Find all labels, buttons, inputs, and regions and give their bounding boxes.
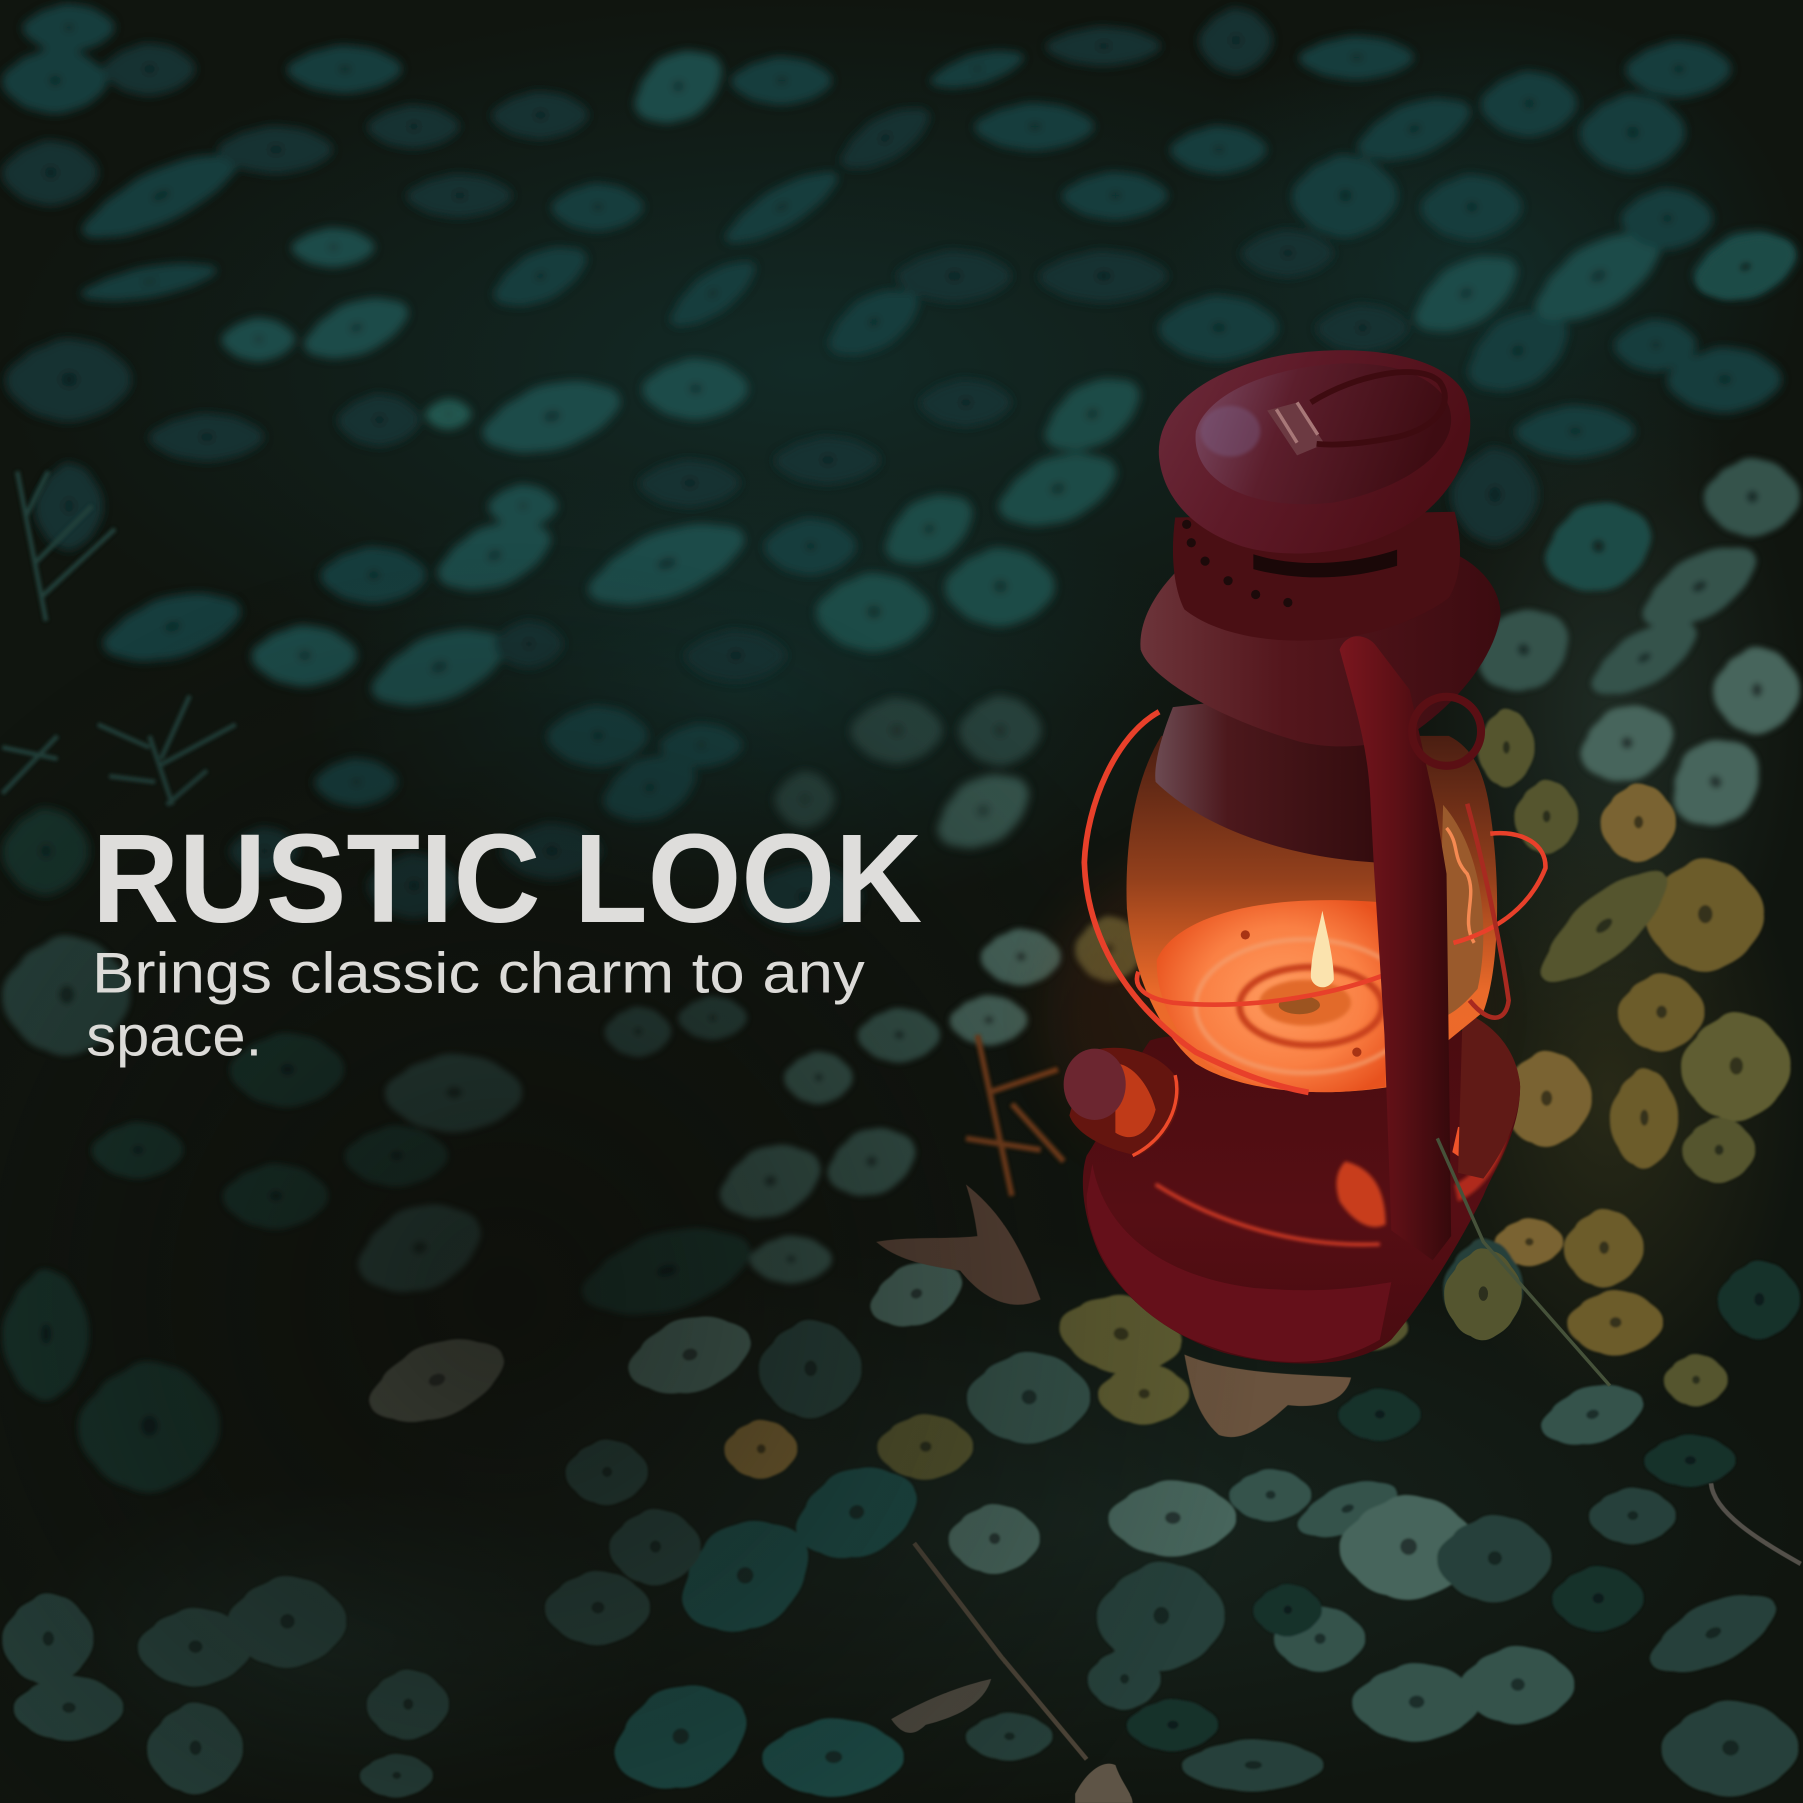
foreground leaf over lantern (1437, 1138, 1610, 1386)
lantern (1064, 350, 1545, 1364)
background leaves: blurred teal foliage at the top (2, 4, 1803, 930)
wire guards (1084, 712, 1545, 1092)
dead leaves and twigs (876, 1035, 1801, 1803)
warm leaves: olive foliage around the lantern (724, 709, 1791, 1480)
side knob (1064, 1048, 1180, 1156)
candle flame (1311, 911, 1334, 987)
subtitle: Brings classic charm to any (92, 941, 865, 1005)
lantern lid (1159, 350, 1470, 554)
foreground leaves: sharp green foliage at the bottom (2, 1249, 1800, 1803)
vented collar (1173, 512, 1460, 641)
lantern brim (1140, 552, 1501, 746)
thorny plant stems at left (2, 471, 236, 805)
lantern glow on ground (1046, 839, 1483, 1184)
handle ring (1412, 697, 1481, 766)
mid-ground leaves: grey-green foliage (2, 223, 1802, 1492)
subtitle (86, 941, 865, 1069)
glass globe (1127, 736, 1497, 1092)
carrying handle bar (1340, 636, 1451, 1260)
glowing burner disc (1157, 900, 1414, 1092)
lantern cone (1155, 690, 1397, 862)
subtitle: space. (86, 1005, 262, 1069)
title: RUSTIC LOOK (92, 808, 922, 949)
lantern base (1083, 1012, 1520, 1364)
